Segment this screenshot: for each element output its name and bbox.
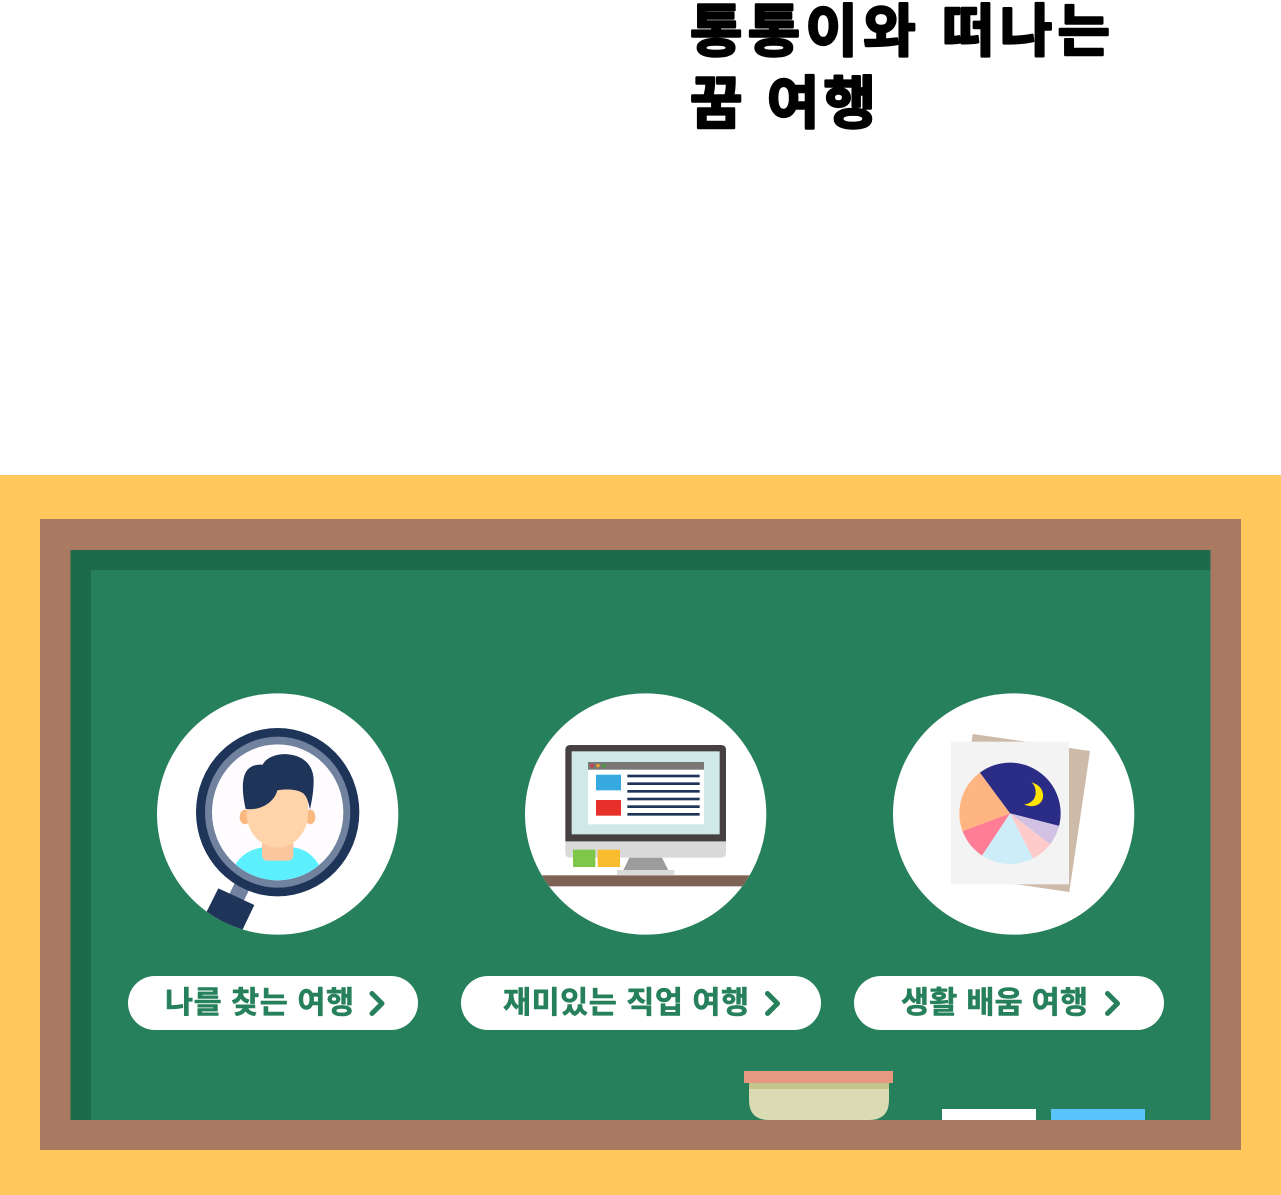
magnifier inner ring [205,737,350,888]
title: 통통이와 떠나는 [690,0,1110,64]
button: 재미있는 직업 여행: 재미있는 직업 여행 [503,986,749,1020]
lavender slice [1010,813,1059,844]
back card [952,734,1090,892]
yellow sticky note [598,850,620,867]
moon [1024,782,1043,806]
button: 나를 찾는 여행 [128,976,418,1030]
button: 생활 배움 여행: 생활 배움 여행 [901,986,1088,1020]
peach slice [959,772,1010,831]
button: 재미있는 직업 여행 [461,976,821,1030]
icon: pie chart cards [893,693,1134,935]
blue block [596,775,621,790]
arrow [1108,994,1118,1014]
text lines [627,775,700,816]
red block [596,800,621,816]
pie chart [959,762,1061,864]
title: 꿈 여행 [690,72,876,136]
window buttons [590,764,606,767]
shirt [236,847,319,880]
icon: computer monitor [523,693,769,935]
arrow [768,994,778,1014]
front card [951,742,1069,884]
monitor body [565,841,726,858]
screen [572,751,720,834]
desk [542,875,750,886]
button: 생활 배움 여행 [854,976,1164,1030]
brown board frame [40,519,1241,1150]
monitor bezel [565,745,726,841]
eraser [744,1071,893,1120]
arrow [372,994,382,1014]
button: 나를 찾는 여행: 나를 찾는 여행 [165,986,354,1020]
white chalk [942,1109,1036,1120]
green sticky note [573,850,595,867]
stand base [617,870,674,875]
pink slice [1010,814,1050,858]
board inner shadow [70,550,1210,1120]
light blue slice [982,814,1033,864]
hair [243,754,314,809]
green board surface [91,570,1210,1120]
browser title bar [588,762,704,770]
monitor stand [623,858,668,870]
eraser shadow band [749,1083,889,1089]
eraser body [749,1083,889,1120]
magnifier ring [196,728,359,896]
magnifier handle [206,888,254,930]
title [690,0,1110,136]
person [235,754,320,885]
neck [262,842,294,861]
face [247,785,308,848]
browser window [588,770,704,824]
navy slice [980,762,1061,826]
hot pink slice [962,814,1010,856]
magnifier neck [230,884,249,900]
panel: chalkboard [0,475,1281,1195]
eraser top [744,1071,893,1083]
blue chalk [1051,1109,1145,1120]
magnifier lens [212,744,343,880]
ears [240,810,248,824]
icon: person in magnifying glass [157,693,398,935]
yellow wall background [0,475,1281,1195]
